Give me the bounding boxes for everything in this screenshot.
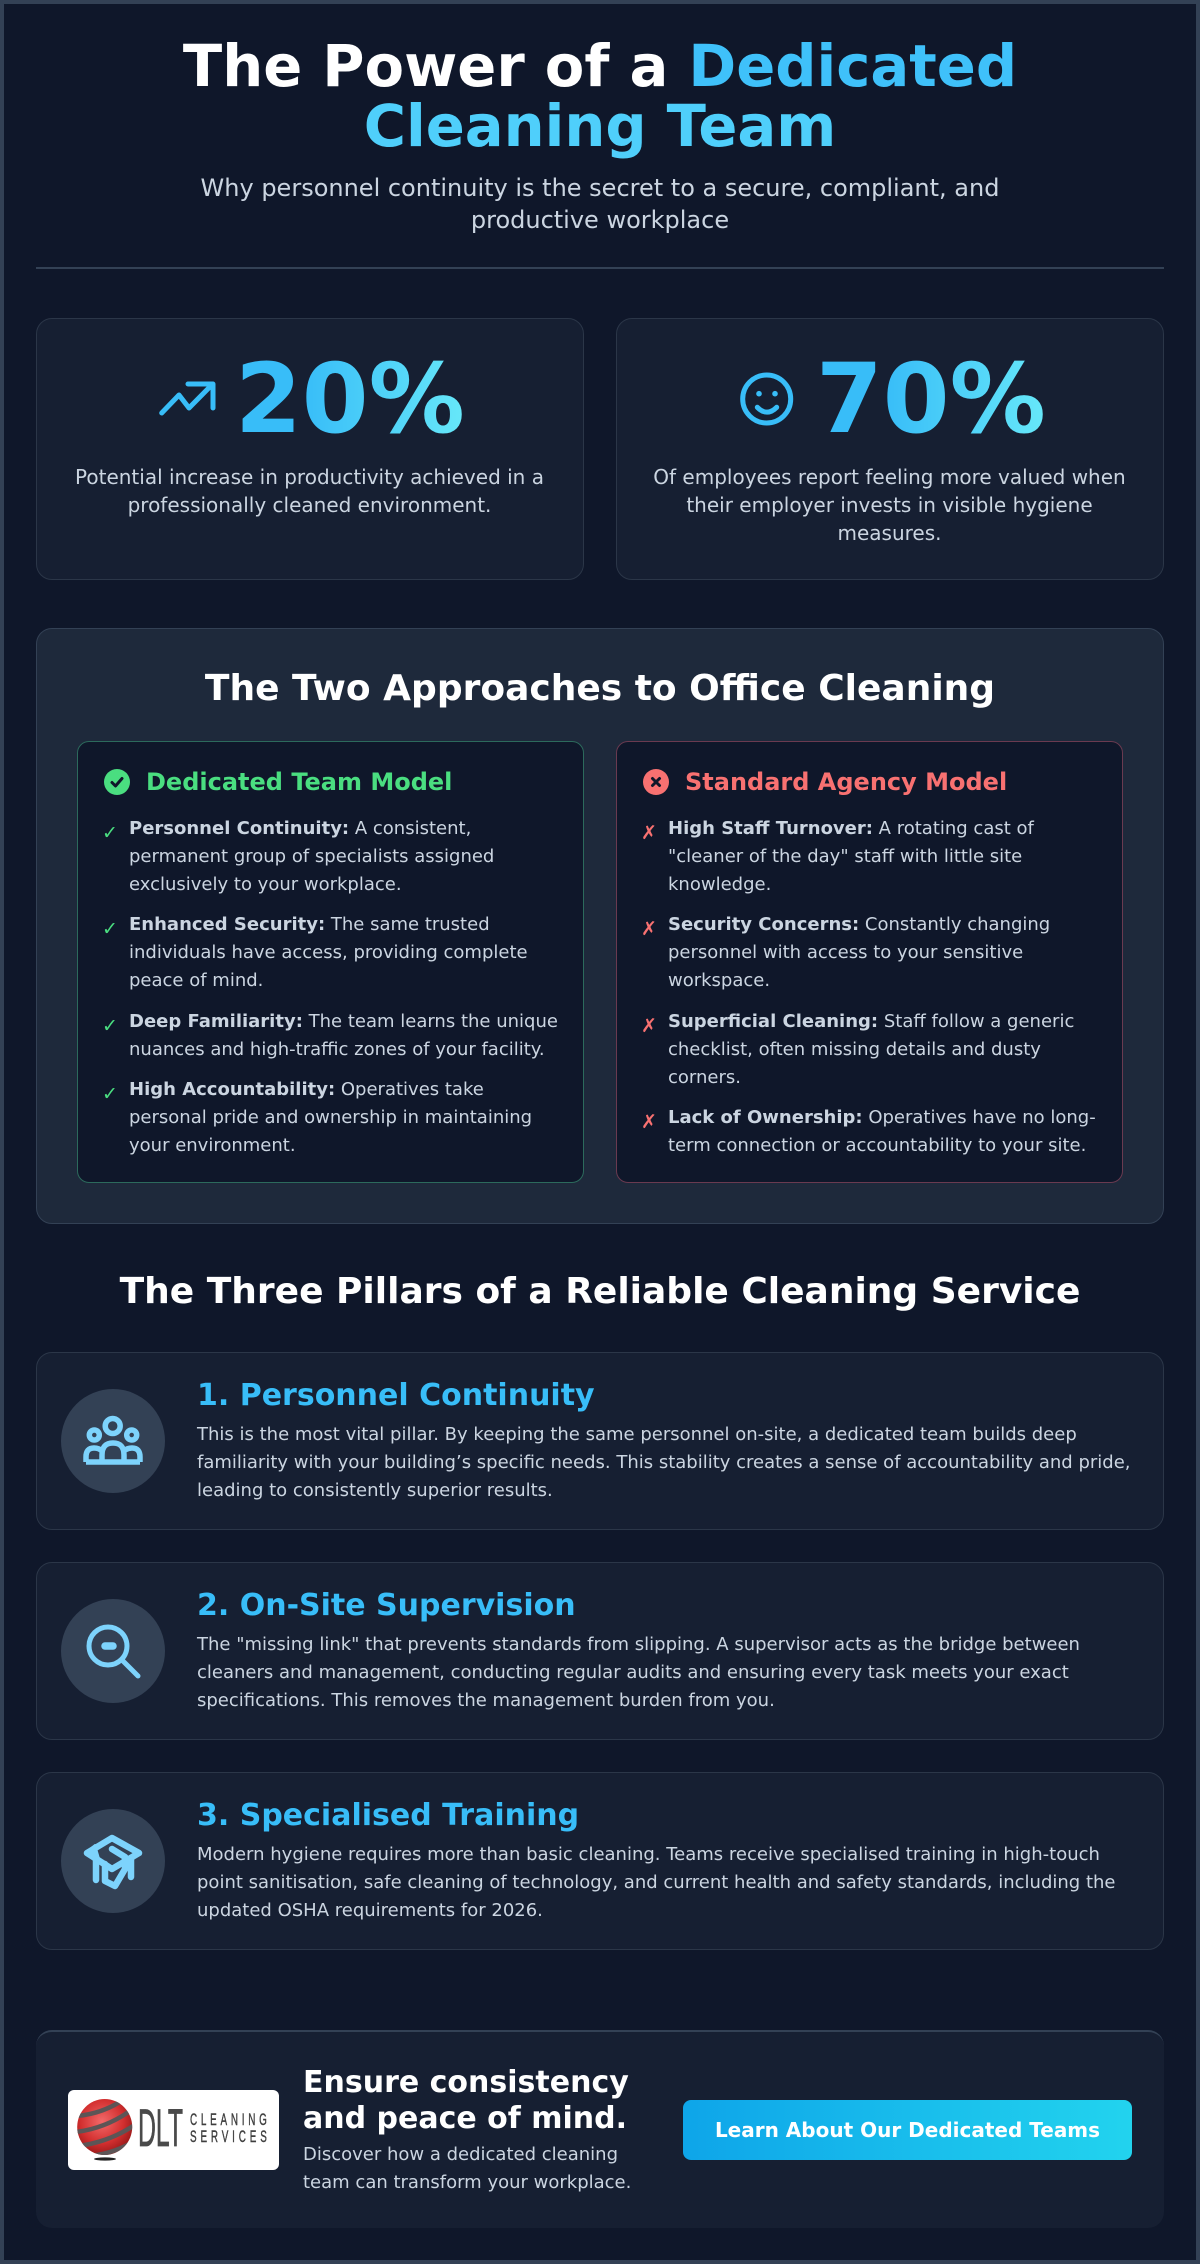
icon: magnifier xyxy=(61,1599,165,1703)
drawbacks list: personnel with access to your sensitive xyxy=(668,942,1023,963)
pillar description: specifications. This removes the management burden from you. xyxy=(197,1690,775,1711)
pillar card: personnel continuity xyxy=(36,1352,1164,1530)
heading: two approaches: The Two Approaches to Office Cleaning xyxy=(205,668,995,709)
subtitle xyxy=(201,174,999,234)
icon: people group xyxy=(61,1389,165,1493)
benefits list: permanent group of specialists assigned xyxy=(129,846,494,867)
pillar title: 3. Specialised Training xyxy=(197,1798,579,1833)
drawbacks list: knowledge. xyxy=(668,874,771,895)
pillar description: cleaners and management, conducting regular audits and ensuring every task meets your exact xyxy=(197,1662,1069,1683)
stat description: Of employees report feeling more valued when their employer invests in visible hygiene measures. xyxy=(653,465,1126,545)
pillar description xyxy=(196,1424,1130,1501)
drawbacks list: workspace. xyxy=(668,970,770,991)
panel: dedicated team model: ✓ xyxy=(102,822,118,844)
panel: standard agency model: ✗ xyxy=(641,1015,657,1037)
logo: DLT Cleaning Services xyxy=(68,2090,279,2170)
call to action text xyxy=(303,2144,631,2193)
drawbacks list: corners. xyxy=(668,1067,741,1088)
drawbacks list: checklist, often missing details and dusty xyxy=(668,1039,1041,1060)
drawbacks list: Lack of Ownership: Operatives have no long- xyxy=(668,1107,1096,1128)
pillar description xyxy=(197,1844,1115,1921)
benefits list: individuals have access, providing complete xyxy=(129,942,528,963)
button: Learn About Our Dedicated Teams xyxy=(715,2118,1100,2142)
benefits list xyxy=(102,818,558,1156)
benefits list: exclusively to your workplace. xyxy=(129,874,402,895)
pillar title: 2. On-Site Supervision xyxy=(197,1588,576,1623)
panel: standard agency model: ✗ xyxy=(641,822,657,844)
stat number: 20%: 20% xyxy=(235,343,465,455)
title: The Power of a Dedicated xyxy=(183,33,1017,100)
column heading: Dedicated Team Model xyxy=(146,768,452,796)
benefits list: your environment. xyxy=(129,1135,296,1156)
panel: standard agency model: ✗ xyxy=(641,918,657,940)
drawbacks list: term connection or accountability to your site. xyxy=(668,1135,1086,1156)
icon: red cross circle xyxy=(643,769,669,795)
call to action panel xyxy=(36,2030,1164,2192)
pillar card: on-site supervision xyxy=(36,1562,1164,1740)
call to action heading: and peace of mind. xyxy=(303,2101,627,2136)
icon: smiley face xyxy=(740,372,794,426)
drawbacks list: Superficial Cleaning: Staff follow a generic xyxy=(668,1011,1074,1032)
drawbacks list xyxy=(641,818,1096,1156)
pillar description: updated OSHA requirements for 2026. xyxy=(197,1900,543,1921)
panel: dedicated team model: ✓ xyxy=(102,918,118,940)
benefits list: Personnel Continuity: A consistent, xyxy=(129,818,471,839)
logo: DLT Cleaning Services: CLEANING xyxy=(190,2110,267,2129)
panel: standard agency model: ✗ xyxy=(641,1111,657,1133)
panel: two approaches comparison xyxy=(36,628,1164,1224)
benefits list: Enhanced Security: The same trusted xyxy=(129,914,490,935)
column heading: Standard Agency Model xyxy=(685,768,1007,796)
stat card: 70 percent xyxy=(616,318,1164,580)
call to action text: Discover how a dedicated cleaning xyxy=(303,2144,618,2165)
pillar card: specialised training xyxy=(36,1772,1164,1950)
panel: standard agency model xyxy=(616,741,1123,1183)
icon: green check circle xyxy=(104,769,130,795)
benefits list: nuances and high-traffic zones of your facility. xyxy=(129,1039,545,1060)
benefits list: High Accountability: Operatives take xyxy=(129,1079,484,1100)
benefits list: Deep Familiarity: The team learns the unique xyxy=(129,1011,558,1032)
heading: three pillars: The Three Pillars of a Reliable Cleaning Service xyxy=(120,1271,1080,1312)
logo: DLT Cleaning Services: SERVICES xyxy=(190,2127,267,2146)
pillar description: point sanitisation, safe cleaning of technology, and current health and safety standards, including the xyxy=(197,1872,1115,1893)
pillar description: familiarity with your building’s specific needs. This stability creates a sense of accountability and pride, xyxy=(197,1452,1130,1473)
logo: DLT Cleaning Services: DLT xyxy=(138,2099,183,2158)
icon: graduation cap xyxy=(61,1809,165,1913)
drawbacks list: Security Concerns: Constantly changing xyxy=(668,914,1050,935)
benefits list: peace of mind. xyxy=(129,970,263,991)
pillar title: 1. Personnel Continuity xyxy=(197,1378,595,1413)
call to action heading xyxy=(303,2065,629,2136)
stat card: 20 percent xyxy=(36,318,584,580)
pillar description: This is the most vital pillar. By keeping the same personnel on-site, a dedicated team builds deep xyxy=(197,1424,1077,1445)
panel: dedicated team model: ✓ xyxy=(102,1083,118,1105)
drawbacks list: "cleaner of the day" staff with little site xyxy=(668,846,1022,867)
panel: dedicated team model: ✓ xyxy=(102,1015,118,1037)
subtitle: productive workplace xyxy=(471,206,729,234)
panel: dedicated team model xyxy=(77,741,584,1183)
call to action text: team can transform your workplace. xyxy=(303,2172,631,2193)
subtitle: Why personnel continuity is the secret to a secure, compliant, and xyxy=(201,174,999,202)
drawbacks list: High Staff Turnover: A rotating cast of xyxy=(668,818,1034,839)
pillar description: leading to consistently superior results. xyxy=(197,1480,553,1501)
pillar description: Modern hygiene requires more than basic cleaning. Teams receive specialised training in high-touch xyxy=(197,1844,1100,1865)
title xyxy=(183,33,1017,160)
benefits list: personal pride and ownership in maintaining xyxy=(129,1107,532,1128)
pillar description: The "missing link" that prevents standards from slipping. A supervisor acts as the bridge between xyxy=(197,1634,1080,1655)
stat number: 70%: 70% xyxy=(816,343,1046,455)
icon: trending up xyxy=(159,382,216,416)
title: Cleaning Team xyxy=(364,93,836,160)
stat description: Potential increase in productivity achieved in a professionally cleaned environment. xyxy=(75,465,544,517)
button xyxy=(683,2100,1132,2160)
call to action heading: Ensure consistency xyxy=(303,2065,629,2100)
pillar description xyxy=(196,1634,1080,1711)
